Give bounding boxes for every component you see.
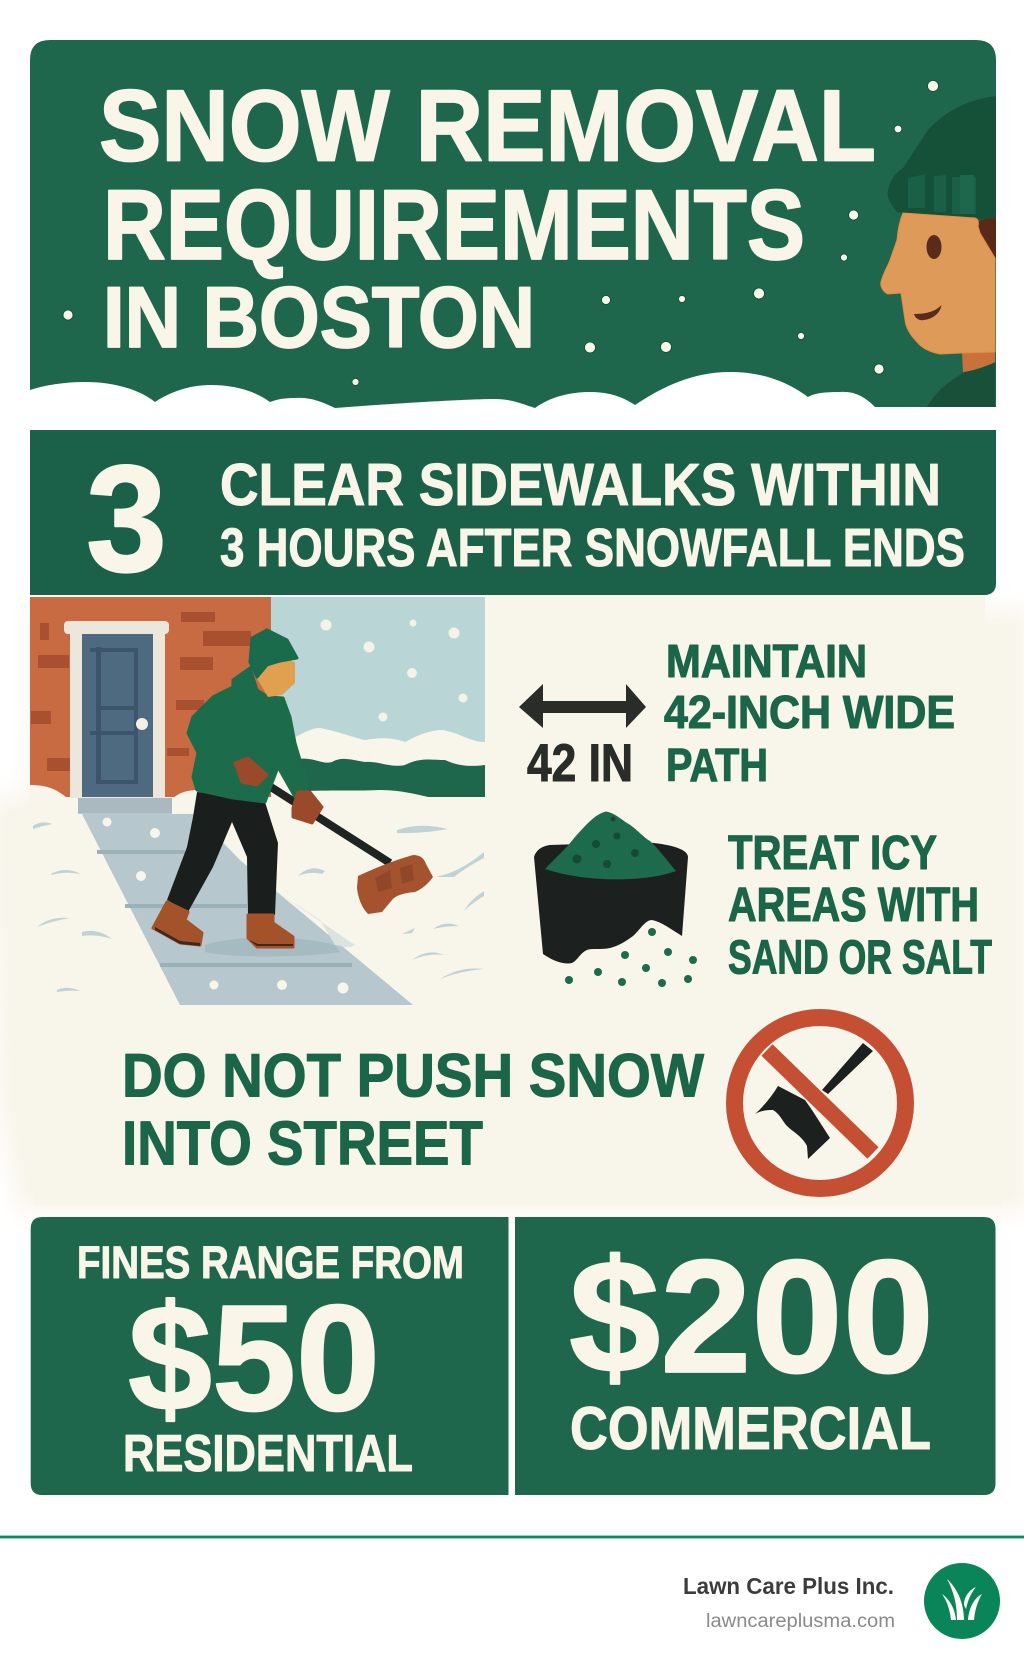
sidewalk path [78, 798, 413, 1005]
title text: SNOW REMOVAL [99, 70, 876, 182]
big number 3: 3 [86, 434, 167, 604]
icon: man's face with winter hat [881, 96, 996, 407]
panel: three-hour rule banner [30, 430, 996, 604]
footer divider [0, 1536, 1024, 1538]
icon: bucket of sand and salt [534, 812, 697, 987]
title text: REQUIREMENTS [103, 169, 805, 280]
snow dashes [33, 822, 484, 992]
text block: do not push snow: INTO STREET [122, 1108, 483, 1178]
company name: Lawn Care Plus Inc. [683, 1573, 894, 1599]
text block: do not push snow: DO NOT PUSH SNOW [122, 1042, 704, 1110]
icon: no shovel prohibition sign [734, 1018, 906, 1188]
amount: $200: $200 [569, 1227, 934, 1407]
panel: cream illustration background [0, 590, 1024, 1212]
text block: maintain path: PATH [666, 739, 768, 791]
footer brand [683, 1563, 1000, 1639]
arrow label: 42 IN [527, 734, 633, 793]
icon: snowflakes in banner [63, 80, 938, 386]
shovel handle and blade [252, 775, 433, 914]
door [64, 621, 169, 798]
person [153, 630, 322, 947]
snow bank and hedge [290, 728, 485, 797]
label: fines range from: FINES RANGE FROM [77, 1237, 464, 1288]
icon: grass logo [924, 1563, 1000, 1639]
sky with falling snow [271, 597, 485, 747]
text block: do not push snow [122, 1042, 704, 1178]
label: commercial: COMMERCIAL [570, 1395, 931, 1462]
label: residential: RESIDENTIAL [123, 1425, 413, 1483]
text block: treat icy areas [728, 827, 992, 984]
heading: clear sidewalks [220, 452, 965, 578]
text block: maintain path [664, 635, 955, 791]
panel: title banner [30, 40, 996, 408]
amount: $50: $50 [128, 1273, 380, 1442]
text block: treat icy areas: TREAT ICY [728, 827, 937, 880]
panel: residential fine [31, 1217, 508, 1495]
icon: 42-inch double arrow [519, 684, 646, 793]
text block: maintain path: MAINTAIN [666, 635, 867, 687]
heading: clear sidewalks: CLEAR SIDEWALKS WITHIN [220, 452, 941, 518]
brick wall [30, 597, 271, 797]
snowy ground [30, 785, 485, 1010]
panel: commercial fine [515, 1217, 996, 1495]
illustration: person shoveling sidewalk [30, 597, 485, 1010]
title text [99, 70, 876, 366]
title text: IN BOSTON [103, 270, 535, 366]
text block: treat icy areas: AREAS WITH [728, 879, 979, 932]
text block: maintain path: 42-INCH WIDE [664, 686, 955, 738]
website: lawncareplusma.com [706, 1611, 895, 1632]
